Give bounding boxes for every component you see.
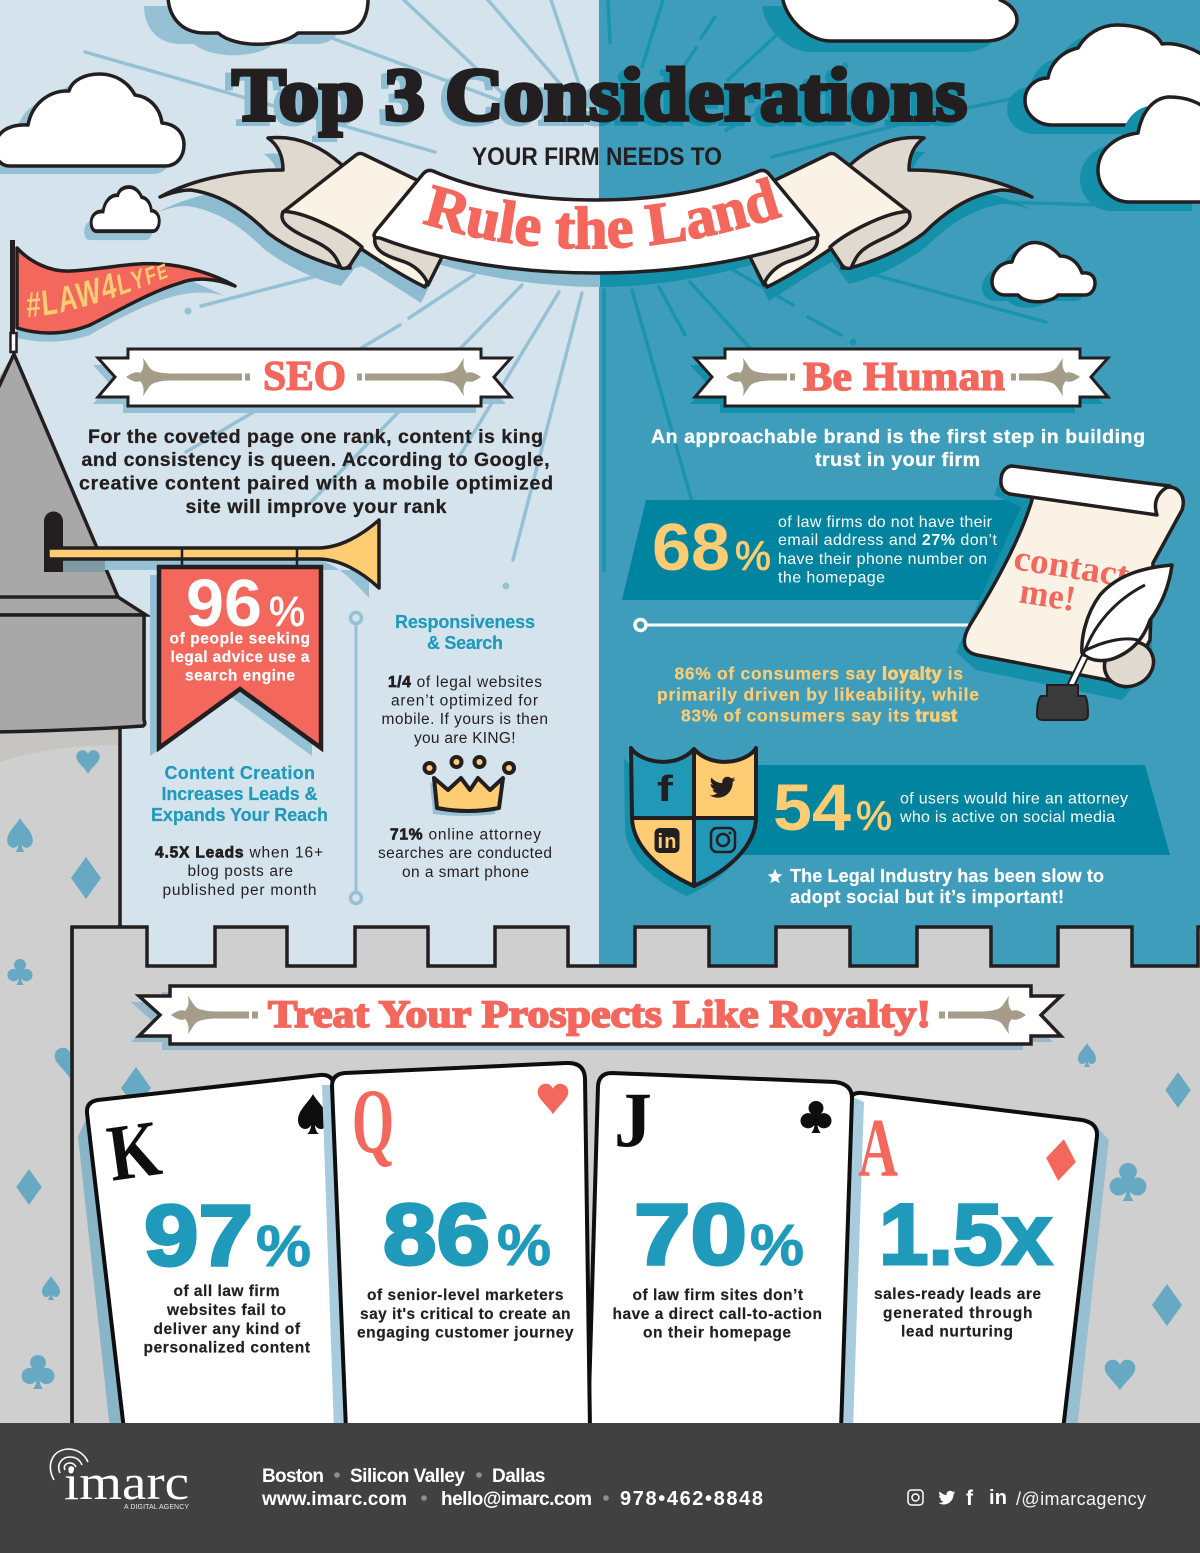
SEO banner bbox=[93, 349, 511, 413]
heading: content creation: Increases Leads & bbox=[162, 784, 318, 804]
king suit bbox=[298, 1094, 328, 1134]
text: 1/4 of websites: aren’t optimized for bbox=[391, 692, 538, 710]
ribbon: right fold bbox=[750, 137, 1032, 287]
icon: linkedin: in bbox=[658, 831, 676, 853]
king text: deliver any kind of bbox=[154, 1321, 301, 1338]
footer social icons: in bbox=[989, 1487, 1007, 1509]
stat band 54%: 54 bbox=[773, 770, 851, 844]
jack stat: 70 bbox=[634, 1187, 747, 1283]
icon: quill feather bbox=[1067, 565, 1172, 686]
banner text: legal advice use a bbox=[170, 649, 310, 666]
red banner 96%: % bbox=[269, 588, 305, 635]
title: Top 3 Considerations bbox=[226, 58, 961, 141]
icon: ink pot bbox=[1037, 685, 1088, 720]
flourish left bbox=[171, 996, 258, 1034]
text: legal industry note: The Legal Industry has been slow to bbox=[790, 866, 1104, 886]
ace letter: A bbox=[858, 1102, 898, 1195]
jack suit bbox=[801, 1101, 831, 1133]
SEO body text bbox=[79, 426, 553, 518]
wall left of battlements bbox=[0, 929, 70, 1429]
banner text bbox=[170, 630, 310, 684]
icon: crown bbox=[424, 757, 514, 816]
text: loyalty and trust bbox=[657, 664, 979, 726]
ribbon: centre band bbox=[374, 170, 818, 273]
scroll illustration bbox=[956, 466, 1183, 720]
jack letter: J bbox=[614, 1076, 652, 1163]
footer social icons: /@imarcagency bbox=[1016, 1489, 1146, 1509]
card: king bbox=[78, 1075, 346, 1430]
Be Human intro text: trust in your firm bbox=[815, 449, 980, 471]
text: legal industry note: adopt social but it’s important! bbox=[790, 887, 1064, 907]
footer contact details: Dallas bbox=[492, 1466, 546, 1487]
Be Human flourish right bbox=[1011, 358, 1080, 396]
castle wall left column bbox=[0, 728, 120, 938]
red banner 96% bbox=[150, 566, 321, 756]
king stat: 97 bbox=[144, 1188, 253, 1284]
subtitle: YOUR FIRM NEEDS TO bbox=[472, 143, 722, 171]
queen stat: % bbox=[497, 1213, 551, 1278]
ace text bbox=[874, 1286, 1041, 1340]
banner text: search engine bbox=[185, 668, 295, 684]
queen text: say it's critical to create an bbox=[360, 1306, 570, 1323]
scroll top roll bbox=[1001, 466, 1170, 515]
jack stat bbox=[634, 1187, 804, 1283]
text: 4.5X leads bbox=[155, 844, 323, 899]
imarc logo: A DIGITAL AGENCY bbox=[124, 1504, 189, 1511]
background: light left half bbox=[0, 0, 600, 1000]
heading: responsiveness bbox=[395, 612, 535, 653]
footer contact details: Boston bbox=[262, 1466, 324, 1487]
jack text: on their homepage bbox=[643, 1324, 791, 1342]
Be Human banner bbox=[690, 349, 1108, 413]
card: ace bbox=[835, 1093, 1109, 1430]
text: 4.5X leads: 4.5X Leads when 16+ bbox=[155, 844, 323, 862]
banner heading: Treat Your Prospects Like Royalty! bbox=[268, 993, 931, 1036]
heading: responsiveness: Responsiveness bbox=[395, 612, 535, 632]
text: 1/4 of websites: you are KING! bbox=[414, 730, 516, 747]
timeline line white bbox=[635, 620, 970, 630]
pennant flag bbox=[9, 240, 237, 354]
text: 1/4 of websites: 1/4 of legal websites bbox=[388, 674, 542, 691]
cloud: right small bbox=[982, 243, 1095, 308]
icon: linkedin bbox=[654, 828, 680, 853]
SEO flourish right bbox=[357, 358, 481, 396]
footer contact details bbox=[261, 1466, 763, 1510]
footer contact details: hello@imarc.com bbox=[441, 1489, 592, 1510]
text: loyalty and trust: 83% of consumers say its trust bbox=[681, 706, 957, 726]
card: queen bbox=[332, 1063, 590, 1430]
ace text: sales-ready leads are bbox=[874, 1286, 1041, 1303]
SEO body text: creative content paired with a mobile optimized bbox=[79, 472, 553, 494]
scroll text: contact bbox=[1011, 537, 1132, 595]
king text: personalized content bbox=[144, 1340, 310, 1356]
heading: content creation: Expands Your Reach bbox=[151, 805, 328, 825]
queen text: of senior-level marketers bbox=[367, 1287, 564, 1304]
Be Human flourish left bbox=[726, 358, 795, 396]
text: loyalty and trust: primarily driven by likeability, while bbox=[657, 684, 979, 704]
ace text: generated through bbox=[883, 1305, 1032, 1322]
castle tower body bbox=[0, 615, 145, 732]
SEO flourish left bbox=[126, 358, 250, 396]
king text: websites fail to bbox=[166, 1302, 286, 1319]
flourish right bbox=[939, 996, 1026, 1034]
stat band 54% bbox=[735, 765, 1170, 855]
footer contact details: www.imarc.com bbox=[261, 1489, 407, 1510]
queen stat bbox=[383, 1187, 551, 1283]
cloud: top right bbox=[762, 0, 1017, 52]
text: 71% searches: searches are conducted bbox=[378, 845, 552, 862]
text: legal industry note bbox=[768, 866, 1104, 907]
stat band 68%: the homepage bbox=[778, 570, 885, 586]
ace text: lead nurturing bbox=[901, 1324, 1013, 1340]
text: 4.5X leads: published per month bbox=[162, 882, 316, 899]
footer social icons bbox=[908, 1487, 1146, 1510]
scroll text bbox=[1006, 537, 1132, 627]
footer contact details: Silicon Valley bbox=[350, 1466, 465, 1487]
queen text: engaging customer journey bbox=[357, 1324, 574, 1342]
stat band 68%: % bbox=[735, 533, 771, 579]
stat 96%: 96 bbox=[186, 566, 262, 641]
stat band 68%: 68 bbox=[652, 510, 730, 585]
jack text: of law firm sites don’t bbox=[632, 1287, 803, 1304]
footer bbox=[0, 1423, 1200, 1553]
SEO body text: and consistency is queen. According to Google, bbox=[82, 449, 550, 471]
pennant flag: #LAW4LYFE bbox=[26, 263, 168, 318]
stat band 68%: of law firms do not have their bbox=[778, 514, 993, 531]
text: 1/4 of websites bbox=[382, 674, 548, 747]
scroll parchment bbox=[964, 487, 1183, 687]
jack text: have a direct call-to-action bbox=[612, 1306, 822, 1323]
queen stat: 86 bbox=[383, 1187, 490, 1283]
scroll bottom roll bbox=[1097, 633, 1161, 695]
stat band 54%: who is active on social media bbox=[899, 809, 1115, 826]
sun rays: right half bbox=[604, 0, 1170, 570]
footer social icons: f bbox=[966, 1487, 974, 1510]
king stat: % bbox=[256, 1214, 311, 1279]
stat band 68% bbox=[622, 500, 1040, 600]
stat band 54%: % bbox=[856, 793, 892, 839]
ace stat: 1.5x bbox=[879, 1187, 1052, 1283]
text: 71% searches: 71% online attorney bbox=[390, 826, 541, 844]
heading: responsiveness: & Search bbox=[427, 633, 503, 653]
icon: star bbox=[768, 869, 782, 883]
cloud: top centre-left bbox=[144, 0, 368, 55]
queen suit bbox=[538, 1084, 568, 1114]
jack text bbox=[612, 1287, 822, 1342]
playing-card suits on the wall bbox=[7, 750, 1191, 1390]
scroll text: me! bbox=[1017, 571, 1079, 619]
text: 1/4 of websites: mobile. If yours is then bbox=[382, 711, 548, 728]
Be Human intro text: An approachable brand is the first step in building bbox=[651, 426, 1145, 448]
background: blue right half bbox=[599, 0, 1200, 1000]
ribbon: left fold bbox=[160, 137, 442, 287]
trumpet bbox=[48, 520, 379, 598]
banner: treat your prospects bbox=[131, 986, 1061, 1050]
imarc logo: imarc bbox=[64, 1454, 189, 1510]
title: Top 3 Considerations bbox=[232, 54, 967, 137]
text: 4.5X leads: blog posts are bbox=[188, 863, 293, 880]
wall left line repaint bbox=[70, 927, 74, 1423]
castle wall with battlements bbox=[72, 927, 1200, 1430]
cloud: right lower bbox=[1080, 97, 1200, 211]
ribbon: shadows bbox=[156, 151, 1034, 303]
text: 71% searches: on a smart phone bbox=[402, 864, 529, 881]
tower arrow slit bbox=[44, 512, 105, 572]
queen letter: Q bbox=[352, 1070, 394, 1172]
cloud: right upper bbox=[1007, 25, 1200, 134]
icon: instagram bbox=[711, 828, 735, 852]
stat band 54%: of users would hire an attorney bbox=[900, 790, 1128, 808]
text: loyalty and trust: 86% of consumers say loyalty is bbox=[674, 664, 963, 684]
SEO body text: For the coveted page one rank, content is king bbox=[88, 426, 543, 448]
sun rays: left half bbox=[85, 0, 582, 590]
banner text: of people seeking bbox=[170, 630, 310, 648]
text: 71% searches bbox=[378, 826, 552, 881]
heading: content creation: Content Creation bbox=[164, 763, 315, 783]
heading: content creation bbox=[151, 763, 328, 825]
king stat bbox=[144, 1188, 311, 1284]
king text: of all law firm bbox=[174, 1283, 280, 1300]
queen text bbox=[357, 1287, 574, 1342]
king text bbox=[144, 1283, 310, 1356]
icon: twitter bbox=[710, 777, 735, 798]
ribbon text: Rule the Land bbox=[422, 176, 783, 250]
shield with social icons bbox=[624, 748, 756, 896]
cloud: left large bbox=[0, 74, 184, 174]
stat band 68%: email address and 27% don’t bbox=[778, 532, 998, 549]
stat band 68%: have their phone number on bbox=[778, 551, 987, 568]
cloud: left small bbox=[84, 187, 159, 240]
Be Human intro text bbox=[651, 426, 1145, 471]
castle tower roof bbox=[0, 352, 146, 640]
ace suit bbox=[1043, 1137, 1079, 1183]
footer contact details: 978•462•8848 bbox=[620, 1488, 763, 1510]
SEO body text: site will improve your rank bbox=[186, 496, 447, 518]
card: jack bbox=[588, 1073, 852, 1430]
ribbon text curve bbox=[420, 210, 800, 248]
timeline divider bbox=[350, 612, 362, 904]
king letter: K bbox=[102, 1104, 166, 1199]
Be Human heading: Be Human bbox=[803, 353, 1005, 399]
icon: facebook: f bbox=[657, 768, 674, 809]
title: Top 3 Considerations bbox=[226, 58, 961, 141]
jack stat: % bbox=[750, 1213, 804, 1278]
SEO heading: SEO bbox=[263, 354, 346, 400]
